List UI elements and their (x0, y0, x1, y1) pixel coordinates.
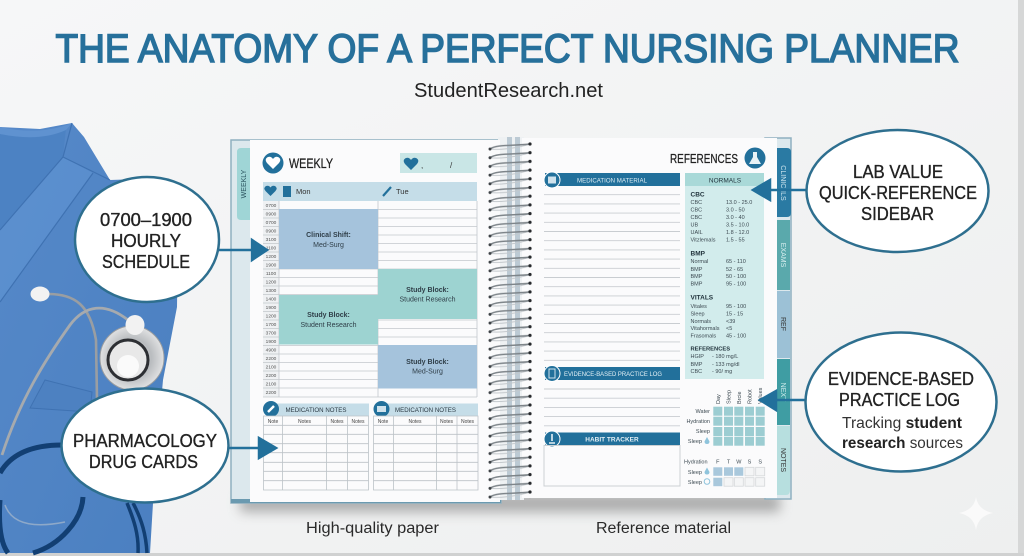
normals sidebar: VITALS (690, 294, 714, 302)
block: study student research tuesday (378, 269, 477, 319)
tab: notes (777, 426, 790, 495)
normals sidebar: 15 - 15 (726, 312, 743, 318)
schedule header (263, 182, 477, 201)
time column: 1100 (266, 271, 276, 277)
left page: weekly (250, 140, 500, 502)
arrow: drug cards (227, 438, 276, 458)
normals sidebar: - 180 mg/L (712, 354, 738, 360)
callout: evidence-based practice log: PRACTICE LOG (839, 390, 960, 410)
callout: lab value sidebar: QUICK-REFERENCE (819, 183, 977, 203)
medication notes table left: MEDICATION NOTES (286, 407, 347, 414)
tab: ref: REF (779, 317, 786, 331)
icon: heartbeat badge (262, 152, 284, 174)
block: clinical shift: Med-Surg (313, 242, 344, 249)
callout: pharmacology drug cards (62, 388, 228, 502)
callout: evidence-based practice log: Tracking student (842, 415, 963, 432)
medication notes table right: Note (378, 419, 388, 425)
right page tabs (777, 148, 791, 495)
habit grid: top: Hydration (686, 419, 710, 425)
medication notes table left (263, 401, 369, 490)
normals sidebar: 3.5 - 10.0 (726, 222, 749, 228)
normals sidebar: 3.0 - 40 (726, 215, 745, 221)
habit grid: bottom: T (727, 460, 731, 466)
block: study student research tuesday: Study Block: (406, 287, 449, 294)
normals sidebar: Normals (690, 319, 711, 325)
normals sidebar: 45 - 100 (726, 334, 746, 340)
time column: 1700 (266, 322, 277, 328)
time column: 3700 (266, 330, 277, 336)
arrow: schedule (218, 240, 267, 260)
tab: notes: NOTES (779, 448, 786, 472)
normals sidebar: BMP (690, 267, 703, 273)
callout: hourly schedule (75, 177, 219, 302)
callout: lab value sidebar: SIDEBAR (861, 204, 934, 224)
habit grid: bottom: F (716, 460, 720, 466)
normals sidebar: 65 - 110 (726, 259, 746, 265)
time column: 4900 (266, 348, 277, 354)
normals sidebar: CBC (690, 192, 705, 198)
section bar: habit tracker (544, 431, 680, 486)
habit grid: top: Day (716, 394, 722, 404)
time column: 1900 (266, 262, 277, 268)
habit grid: bottom: Sleep (688, 480, 702, 486)
medication notes table left: Notes (351, 419, 365, 425)
medication notes table right: Notes (461, 419, 475, 425)
tab: exams (777, 220, 790, 290)
medication notes table right: MEDICATION NOTES (395, 407, 456, 414)
schedule header: Mon (296, 187, 311, 196)
normals sidebar: Frasomals (690, 334, 716, 340)
normals sidebar: Vitzlemals (690, 238, 716, 244)
normals sidebar: 95 - 100 (726, 282, 746, 288)
normals sidebar: BMP (690, 274, 703, 280)
block: study student research monday (279, 295, 378, 344)
block: study student research tuesday: Student Research (399, 296, 456, 304)
habit grid: top: Water (696, 409, 710, 415)
time column: 1400 (266, 296, 277, 302)
time column: 1300 (266, 288, 277, 294)
stethoscope tubing (48, 294, 97, 400)
block: study student research monday: Study Block: (307, 312, 350, 319)
callout: evidence-based practice log: research sources (842, 435, 963, 452)
block: clinical shift: Clinical Shift: (306, 232, 351, 239)
block: study med-surg tuesday: Study Block: (406, 359, 449, 366)
normals sidebar: 1.5 - 55 (726, 238, 745, 244)
normals sidebar: 13.0 - 25.0 (726, 200, 752, 206)
normals sidebar: CBC (690, 369, 702, 375)
block: study student research monday: Student Research (300, 322, 357, 329)
tab: ref (777, 291, 790, 358)
habit grid: top: Values (758, 387, 764, 404)
icon: flask badge (744, 148, 766, 168)
block: study med-surg tuesday: Med-Surg (412, 368, 443, 376)
habit grid: bottom: S (748, 460, 752, 466)
normals sidebar: BMP (690, 282, 703, 288)
normals sidebar: 52 - 65 (726, 267, 743, 273)
time column: 2100 (266, 364, 277, 370)
normals sidebar: 1.8 - 12.0 (726, 230, 749, 236)
normals sidebar: 3.0 - 50 (726, 208, 745, 214)
time column: 2200 (266, 356, 277, 362)
callout: hourly schedule: 0700–1900 (100, 210, 192, 230)
arrow: lab values (753, 180, 808, 200)
normals sidebar: CBC (690, 208, 702, 214)
normals sidebar: Normal (690, 259, 708, 265)
section bar: medication material (544, 172, 680, 188)
normals sidebar: CBC (690, 215, 702, 221)
normals sidebar: CBC (690, 200, 702, 206)
icon: sparkle (959, 497, 993, 530)
callout: lab value sidebar (806, 130, 988, 252)
title: THE ANATOMY OF A PERFECT NURSING PLANNER (56, 27, 960, 71)
block: study med-surg tuesday (378, 345, 477, 388)
section bar: medication material: MEDICATION MATERIAL (577, 178, 647, 184)
block: clinical shift (279, 209, 378, 269)
planner cover left (231, 140, 501, 503)
tab: weekly: WEEKLY (241, 169, 248, 198)
spiral binding (487, 142, 537, 499)
tab: clinicals (777, 148, 791, 217)
stethoscope chest piece (100, 326, 164, 390)
caption: high-quality paper: High-quality paper (306, 520, 439, 537)
normals sidebar: <39 (726, 319, 735, 325)
medication notes table right (374, 401, 478, 490)
normals sidebar: - 90/ mg (712, 369, 732, 375)
normals sidebar: 50 - 100 (726, 274, 746, 280)
callout: evidence-based practice log (806, 332, 996, 472)
scrubs and stethoscope photo (0, 123, 178, 553)
date box (400, 153, 477, 173)
habit grid: bottom: W (736, 460, 742, 466)
habit grid: bottom: Hydration (684, 460, 708, 466)
tab: exams: EXAMS (779, 243, 786, 268)
tab: clinicals: CLINIC ILS (779, 165, 786, 201)
habit grid: top: Sleep (696, 429, 710, 435)
tab: next: NEXT (779, 383, 786, 402)
medication notes table left: Notes (330, 419, 344, 425)
normals sidebar: Vitales (690, 304, 707, 310)
normals sidebar: BMP (690, 250, 706, 258)
time column: 0700 (266, 220, 277, 226)
normals sidebar: HGIP (690, 354, 704, 360)
date box: / (450, 161, 453, 170)
normals sidebar: REFERENCES (690, 346, 730, 352)
medication notes table left: Notes (298, 419, 312, 425)
planner (231, 137, 791, 512)
normals sidebar: BMP (690, 362, 703, 368)
time column: 1900 (266, 339, 277, 345)
right page: references (522, 138, 777, 498)
date box: , (421, 161, 423, 170)
normals sidebar: Sleep (690, 312, 705, 318)
spine (498, 137, 524, 500)
time column: 1900 (266, 305, 277, 311)
callout: pharmacology drug cards: PHARMACOLOGY (73, 431, 217, 451)
normals sidebar (685, 173, 764, 379)
medication notes table right: Notes (440, 419, 454, 425)
callout: pharmacology drug cards: DRUG CARDS (89, 452, 198, 472)
medication notes table right: Notes (408, 419, 422, 425)
callout: hourly schedule: SCHEDULE (102, 252, 190, 272)
schedule header: Tue (396, 187, 409, 196)
habit grid: top: Sleep (726, 390, 732, 404)
tab: weekly (237, 148, 250, 220)
time column: 0900 (266, 228, 277, 234)
caption: reference material: Reference material (596, 520, 731, 537)
time column: 2200 (266, 373, 277, 379)
normals sidebar: UB (690, 222, 698, 228)
weekly heading: WEEKLY (289, 156, 333, 171)
normals sidebar: NORMALS (709, 178, 742, 184)
callout: lab value sidebar: LAB VALUE (853, 162, 943, 182)
section bar: evidence-based practice log (544, 366, 680, 382)
time column: 1200 (266, 254, 277, 260)
time column: 1100 (266, 246, 276, 252)
normals sidebar: UAIL (690, 230, 703, 236)
time column: 0900 (266, 212, 277, 218)
tab: next (777, 359, 790, 425)
habit grid: top: Brcie (737, 391, 743, 404)
time column: 2100 (266, 382, 277, 388)
time column: 1200 (266, 314, 277, 320)
habit grid: bottom: S (758, 460, 762, 466)
time column: 3100 (266, 237, 277, 243)
normals sidebar: - 133 mg/dl (712, 362, 740, 368)
time column: 0700 (266, 203, 277, 209)
habit grid: bottom: Sleep (688, 470, 702, 476)
arrow: practice log (760, 391, 807, 410)
callout: hourly schedule: HOURLY (111, 231, 181, 251)
habit grid: top: Robot (748, 389, 754, 404)
normals sidebar: 95 - 100 (726, 304, 746, 310)
subtitle: website: StudentResearch.net (414, 80, 603, 102)
stethoscope ear tips (30, 286, 50, 302)
callout: evidence-based practice log: EVIDENCE-BASED (828, 369, 974, 389)
planner cover right (765, 138, 791, 499)
habit grid: top (686, 387, 765, 446)
section bar: evidence-based practice log: EVIDENCE-BASED PRACTICE LOG (564, 371, 662, 378)
time column: 2200 (266, 390, 277, 396)
section bar: habit tracker: HABIT TRACKER (585, 436, 639, 444)
normals sidebar: <5 (726, 326, 732, 332)
habit grid: top: Sleep (688, 439, 702, 445)
medication notes table left: Note (268, 419, 278, 425)
habit grid: bottom (684, 460, 765, 486)
time column: 1200 (266, 280, 277, 286)
time column (263, 201, 279, 397)
references heading: REFERENCES (670, 152, 738, 166)
normals sidebar: Vitahormals (690, 326, 720, 332)
